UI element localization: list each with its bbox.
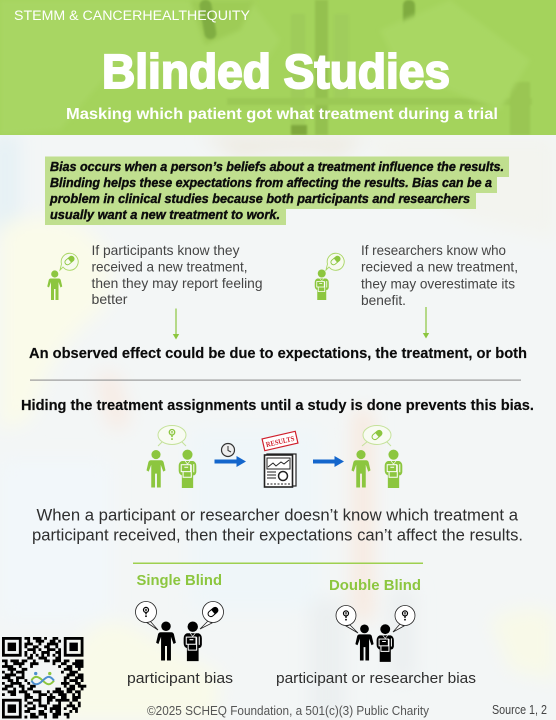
heading: double blind: Double Blind — [329, 578, 421, 594]
label: participant or researcher bias: participant or researcher bias — [276, 670, 476, 687]
diagram: blinded timeline — [146, 426, 402, 488]
text: participants: received a new treatment, — [92, 258, 248, 274]
panel: bias definition — [45, 156, 509, 225]
icon: QR logo — [32, 672, 54, 684]
icon: results report — [262, 431, 298, 487]
panel: bias definition: Bias occurs when a person’s beliefs about a treatment influence the results. — [50, 159, 504, 174]
icon: pair with question — [146, 426, 196, 488]
panel: bias definition: Blinding helps these expectations from affecting the results. Bias can be a — [50, 175, 492, 190]
statement: observed effect: An observed effect could be due to expectations, the treatment, or both — [29, 346, 527, 362]
arrow: left down — [173, 308, 179, 340]
text: researchers: If researchers know who — [361, 242, 506, 258]
text: researchers — [361, 242, 518, 308]
icon: researcher with pill thought — [315, 253, 344, 300]
panel: single blind — [127, 573, 233, 687]
text: participants — [92, 242, 262, 307]
panel: double blind — [276, 578, 476, 687]
footer: copyright: ©2025 SCHEQ Foundation, a 501(c)(3) Public Charity — [147, 704, 430, 718]
icon: clock — [222, 444, 234, 456]
stamp: results: RESULTS — [265, 434, 295, 449]
brand label: STEMM & CANCERHEALTHEQUITY — [14, 8, 250, 23]
text: participants: better — [92, 291, 128, 307]
heading: hiding assignments: Hiding the treatment assignments until a study is done prevents this bias. — [21, 398, 534, 414]
icon: pair with pill — [352, 426, 402, 488]
panel: bias definition: usually want a new treatment to work. — [50, 207, 280, 222]
header banner — [0, 0, 556, 135]
QR code — [2, 638, 86, 717]
arrow: blue first — [214, 456, 246, 467]
text: explanation — [32, 506, 523, 544]
subtitle: Masking which patient got what treatment during a trial — [66, 106, 498, 123]
text: participants: If participants know they — [92, 242, 240, 258]
text: participants: then they may report feeling — [92, 275, 262, 291]
arrow: blue second — [313, 456, 344, 467]
icon: single blind figures — [136, 602, 224, 661]
panel: bias definition: problem in clinical studies because both participants and researchers — [49, 191, 470, 206]
heading: single blind: Single Blind — [136, 573, 222, 589]
footer: source: Source 1, 2 — [492, 703, 547, 717]
label: participant bias: participant bias — [127, 670, 233, 687]
text: researchers: recieved a new treatment, — [361, 258, 518, 274]
text: explanation: When a participant or researcher doesn’t know which treatment a — [36, 506, 519, 524]
icon: participant with pill thought — [47, 253, 78, 300]
text: researchers: they may overestimate its — [361, 276, 515, 292]
title: Blinded Studies — [102, 46, 450, 99]
arrow: right down — [423, 307, 429, 338]
icon: double blind figures — [336, 606, 415, 662]
text: researchers: benefit. — [361, 292, 406, 308]
text: explanation: participant received, then their expectations can’t affect the results. — [32, 526, 523, 544]
